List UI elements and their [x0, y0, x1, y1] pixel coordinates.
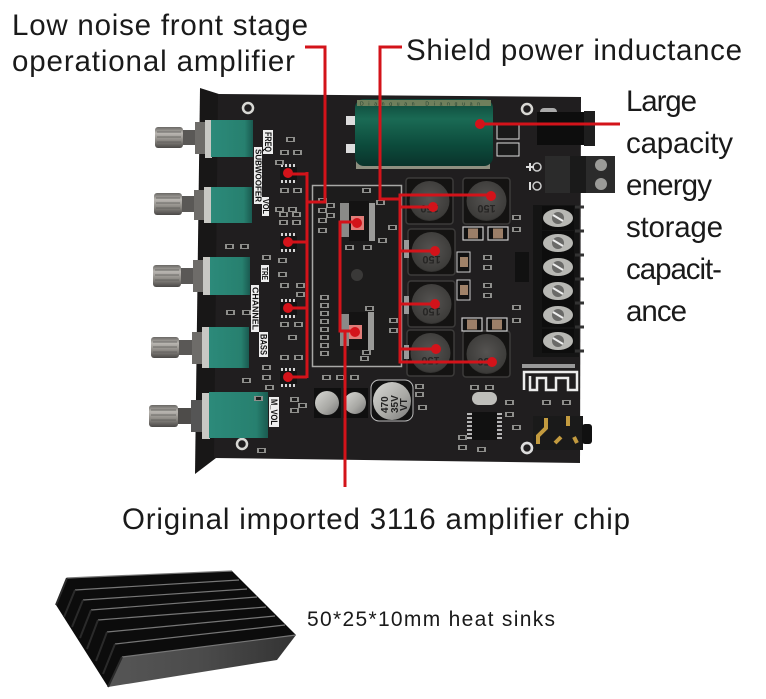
silkscreen labels: VOL [261, 199, 270, 214]
heading: large capacity energy storage capacitance: storage [626, 211, 723, 244]
heading: large capacity energy storage capacitance: energy [626, 169, 712, 202]
screw power connector [526, 156, 615, 193]
heading: large capacity energy storage capacitance [626, 85, 733, 328]
heading: large capacity energy storage capacitance: ance [626, 295, 687, 328]
heading: shield power inductance: Shield power inductance [406, 34, 742, 67]
silkscreen labels: BASS [258, 334, 268, 355]
electrolytic capacitors: VT [399, 398, 410, 411]
amplifier chips [340, 188, 398, 361]
power jack [537, 108, 595, 146]
large energy storage capacitor [346, 99, 493, 169]
speaker terminal block [533, 205, 584, 357]
mounting holes [237, 103, 532, 453]
electrolytic capacitors: 35V [390, 395, 401, 413]
knob and potentiometer 1 [155, 120, 253, 158]
audio jack [522, 416, 592, 453]
callout line: energy storage capacitor [475, 119, 620, 129]
silkscreen labels: M_VOL [269, 399, 279, 425]
knob and potentiometer 3 [153, 257, 250, 295]
knob and potentiometer 2 [154, 187, 252, 223]
heading: low noise front stage operational amplifier: Low noise front stage [12, 9, 308, 42]
panel: amplifier board photo [149, 88, 615, 474]
silkscreen labels [250, 130, 279, 427]
silkscreen labels: CHANNEL [250, 287, 260, 330]
heading: large capacity energy storage capacitance: capacit- [626, 253, 722, 286]
circuit board [214, 94, 581, 463]
knob and potentiometer 4 [151, 327, 249, 368]
heat sink photo [56, 571, 296, 687]
electrolytic capacitors: 470 [380, 396, 391, 413]
callout lines: shield power inductance [380, 47, 497, 367]
six shielded power inductors [404, 178, 529, 377]
silkscreen labels: SUBWOOFER [254, 149, 262, 202]
metal side bracket [195, 88, 222, 474]
heat sink caption: 50*25*10mm heat sinks [307, 608, 555, 631]
electrolytic capacitors [314, 375, 413, 421]
large energy storage capacitor: Dianguan Dianguan [360, 102, 480, 108]
bluetooth chip and crystal [415, 384, 571, 452]
heading: low noise front stage operational amplifier: operational amplifier [12, 45, 295, 78]
heading: large capacity energy storage capacitance: Large [626, 85, 697, 118]
heading: amplifier chip: Original imported 3116 amplifier chip [122, 503, 630, 536]
silkscreen labels: FREQ [263, 132, 273, 152]
silkscreen labels: TRE [260, 267, 269, 281]
callout lines: amplifier chip [340, 218, 362, 487]
callout lines: low noise op-amp [283, 47, 325, 382]
heading: low noise front stage operational amplifier [12, 9, 308, 78]
wifi antenna trace [522, 364, 577, 390]
small parts next to capacitor [497, 125, 519, 156]
small surface-mount components, left [225, 137, 335, 453]
heading: large capacity energy storage capacitance: capacity [626, 127, 733, 160]
amplifier chip area outline [312, 186, 402, 366]
knob and potentiometer 5 [149, 392, 268, 439]
